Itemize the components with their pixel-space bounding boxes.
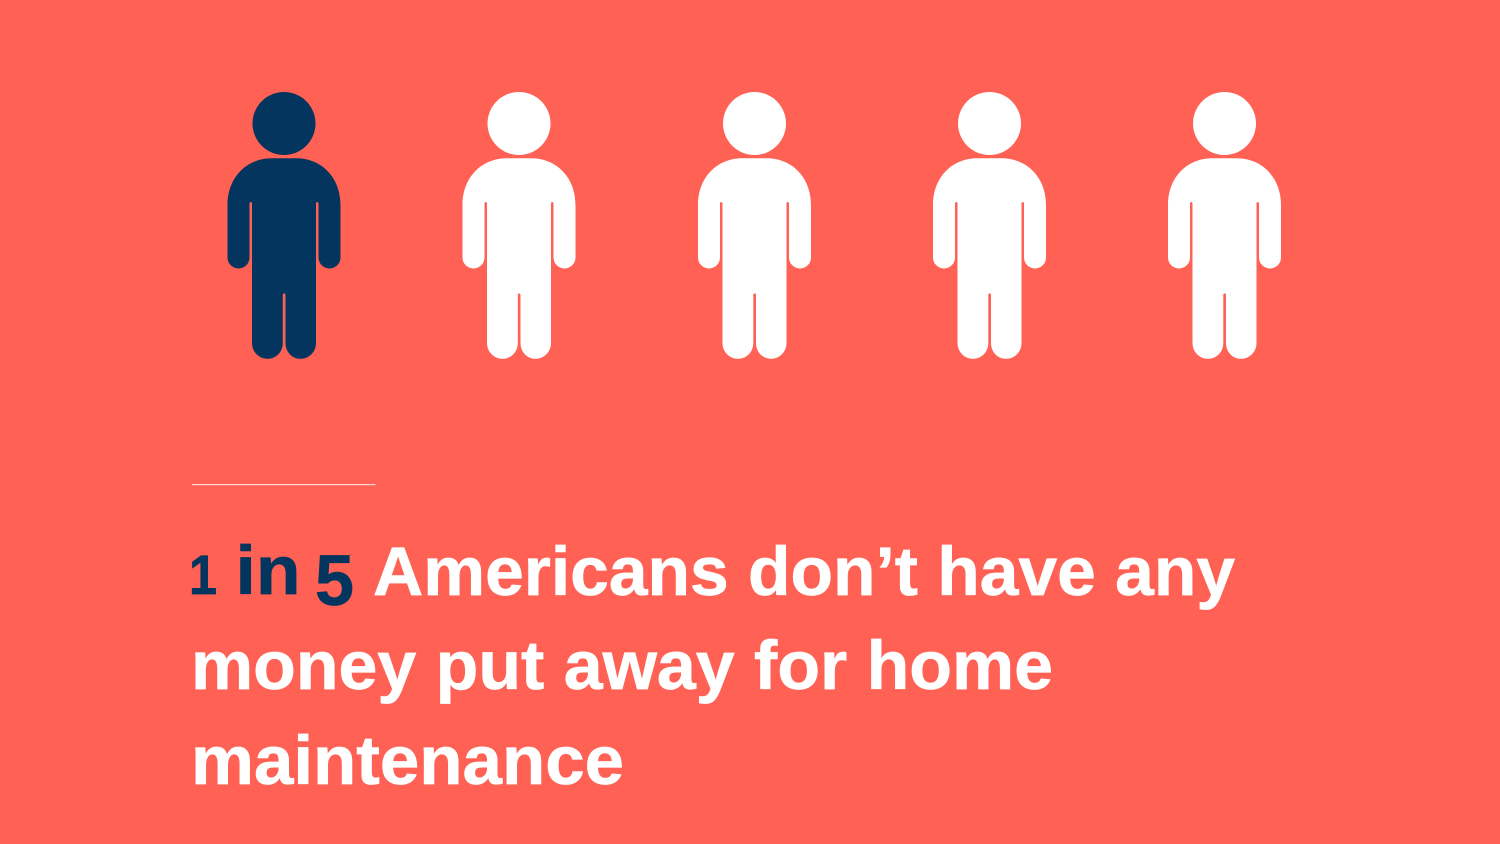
icon: person 3 white bbox=[698, 92, 811, 359]
highlighted statistic bbox=[189, 532, 354, 621]
icon: person 4 white bbox=[933, 92, 1046, 359]
headline line 3: maintenance bbox=[191, 722, 624, 799]
headline line 1: Americans don’t have any bbox=[373, 533, 1235, 610]
highlighted statistic: 5 bbox=[315, 542, 354, 621]
headline text bbox=[189, 532, 1235, 799]
icon: person 1 highlighted navy bbox=[228, 92, 340, 359]
highlighted statistic: 1 bbox=[189, 543, 217, 606]
headline line 2: money put away for home bbox=[191, 627, 1053, 704]
highlighted statistic: in bbox=[236, 532, 300, 609]
icon: person 5 white bbox=[1168, 92, 1281, 359]
icon: person 2 white bbox=[462, 92, 576, 359]
